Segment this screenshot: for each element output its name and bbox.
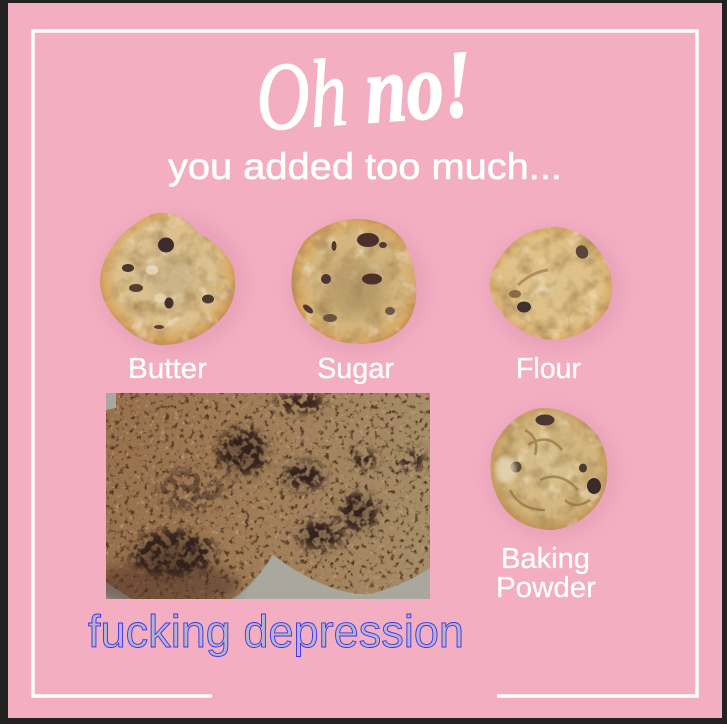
cookie: baking powder <box>488 408 616 537</box>
subtitle: you added too much... <box>168 146 562 187</box>
label: Flour: Flour <box>516 353 581 385</box>
label: Sugar: Sugar <box>317 353 394 385</box>
label: Baking Powder <box>496 543 596 604</box>
flat cookie base <box>106 393 430 599</box>
label: Baking Powder: Powder <box>496 572 596 604</box>
cookie: flour <box>489 227 622 349</box>
caption: fucking depression: fucking depression <box>88 606 464 657</box>
label: Butter: Butter <box>128 353 207 385</box>
label: Baking Powder: Baking <box>501 543 590 575</box>
photo: burnt flat cookies <box>106 393 430 599</box>
cookie: butter <box>100 213 244 352</box>
burnt patches <box>129 393 426 577</box>
title: Oh no!: Oh no! <box>253 29 475 151</box>
cookie: sugar <box>290 219 426 353</box>
darker lower-left tone <box>90 561 240 609</box>
